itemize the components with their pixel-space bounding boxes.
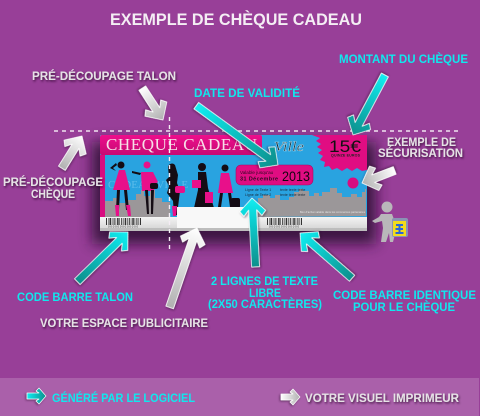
- legend white arrow: [281, 389, 300, 405]
- amount in words: QUINZE EUROS: [331, 154, 361, 158]
- label: code barre identique: [333, 288, 476, 314]
- left pink band: [100, 155, 105, 217]
- label: votre espace publicitaire: VOTRE ESPACE PUBLICITAIRE: [40, 316, 208, 330]
- cut line: cheque: [54, 130, 460, 132]
- title: EXEMPLE DE CHÈQUE CADEAU: [110, 10, 362, 29]
- legend cyan arrow: [27, 388, 46, 404]
- validity date: 31 Décembre: [240, 176, 278, 182]
- logo: Ville: Ville: [274, 140, 304, 155]
- woman 3: [166, 164, 185, 216]
- label: exemple de sécurisation: [378, 135, 463, 160]
- security mark: [348, 178, 358, 188]
- arrow: lignes de texte: [239, 197, 269, 268]
- cheque body: [100, 135, 367, 231]
- legend band: [0, 378, 479, 416]
- cheque shadow: [92, 142, 376, 244]
- label: 2 lignes de texte libre: LIBRE: [249, 286, 281, 300]
- woman 4: [192, 163, 214, 216]
- label: montant du chèque: MONTANT DU CHÈQUE: [339, 51, 468, 66]
- cut line: talon: [168, 117, 170, 249]
- woman 1: [110, 162, 131, 216]
- barcode talon: 0000000000000: [108, 224, 138, 228]
- watermark text: CADEAU VILLE: [108, 179, 188, 191]
- header band: [100, 135, 262, 155]
- label: pré-découpage chèque: PRÉ-DÉCOUPAGE: [3, 174, 103, 189]
- arrow: date de validité: [189, 95, 286, 176]
- label: exemple de sécurisation: EXEMPLE DE: [387, 135, 456, 149]
- label: pré-découpage talon: PRÉ-DÉCOUPAGE TALON: [32, 68, 176, 83]
- label: exemple de sécurisation: SÉCURISATION: [378, 145, 463, 160]
- amount: 15€: [329, 137, 362, 156]
- badge zigzag: [312, 135, 367, 171]
- advertising space: [177, 207, 258, 228]
- label: pré-découpage chèque: CHÈQUE: [31, 186, 75, 201]
- arrow: code barre talon: [68, 223, 137, 291]
- arrow: code barre identique: [291, 223, 361, 288]
- bottom bevel: [100, 228, 367, 231]
- icon: 3D figure with box: [372, 202, 408, 242]
- band background: [0, 378, 479, 416]
- legend cyan text: GÉNÉRÉ PAR LE LOGICIEL: [52, 390, 195, 405]
- legend white text: VOTRE VISUEL IMPRIMEUR: [305, 391, 459, 405]
- box: [392, 218, 408, 237]
- free text lines: texte texte texte: [280, 188, 305, 192]
- label: code barre identique: POUR LE CHÈQUE: [353, 299, 455, 314]
- legal notice: Bon d'achat valable dans les commerces partenaires: [300, 210, 366, 214]
- validity label: Valable jusqu'au: [240, 170, 274, 175]
- arrow: exemple de sécurisation: [357, 158, 399, 195]
- arrow: espace publicitaire: [157, 224, 209, 312]
- arrow: pré-découpage talon: [131, 81, 174, 127]
- silhouettes: women shopping: [110, 162, 240, 216]
- pill shape: [236, 165, 313, 185]
- validity year: 2013: [282, 169, 310, 184]
- figure: [372, 202, 397, 242]
- validity pill: [236, 165, 313, 185]
- label: date de validité: DATE DE VALIDITÉ: [194, 85, 300, 100]
- free text lines: [245, 188, 305, 197]
- label: code barre identique: CODE BARRE IDENTIQUE: [333, 288, 476, 302]
- legend: printer visual: [281, 389, 459, 405]
- arrow: pré-découpage chèque: [51, 129, 93, 175]
- free text lines: texte texte texte: [280, 193, 305, 197]
- city skyline: [105, 188, 366, 218]
- barcode cheque: 0000000000000: [269, 224, 299, 228]
- label: 2 lignes de texte libre: (2X50 CARACTÈRES): [208, 296, 322, 311]
- free text lines: Ligne de Texte 1: [245, 188, 271, 192]
- label: code barre talon: CODE BARRE TALON: [17, 290, 133, 304]
- barcode talon: [106, 222, 141, 228]
- legend: generated by software: [27, 388, 195, 405]
- arrow: montant du chèque: [342, 69, 396, 141]
- label: pré-découpage chèque: [3, 174, 103, 201]
- woman 2: [132, 162, 158, 214]
- price badge: [312, 135, 367, 171]
- woman 5: [218, 164, 240, 208]
- label: 2 lignes de texte libre: [208, 274, 322, 311]
- cheque title: CHEQUE CADEAU: [106, 135, 257, 154]
- white strip: [100, 217, 367, 228]
- free text lines: Ligne de Texte 2: [245, 193, 271, 197]
- barcode cheque: [267, 222, 302, 228]
- gift cheque: [100, 135, 367, 231]
- label: 2 lignes de texte libre: 2 LIGNES DE TEXTE: [211, 274, 318, 288]
